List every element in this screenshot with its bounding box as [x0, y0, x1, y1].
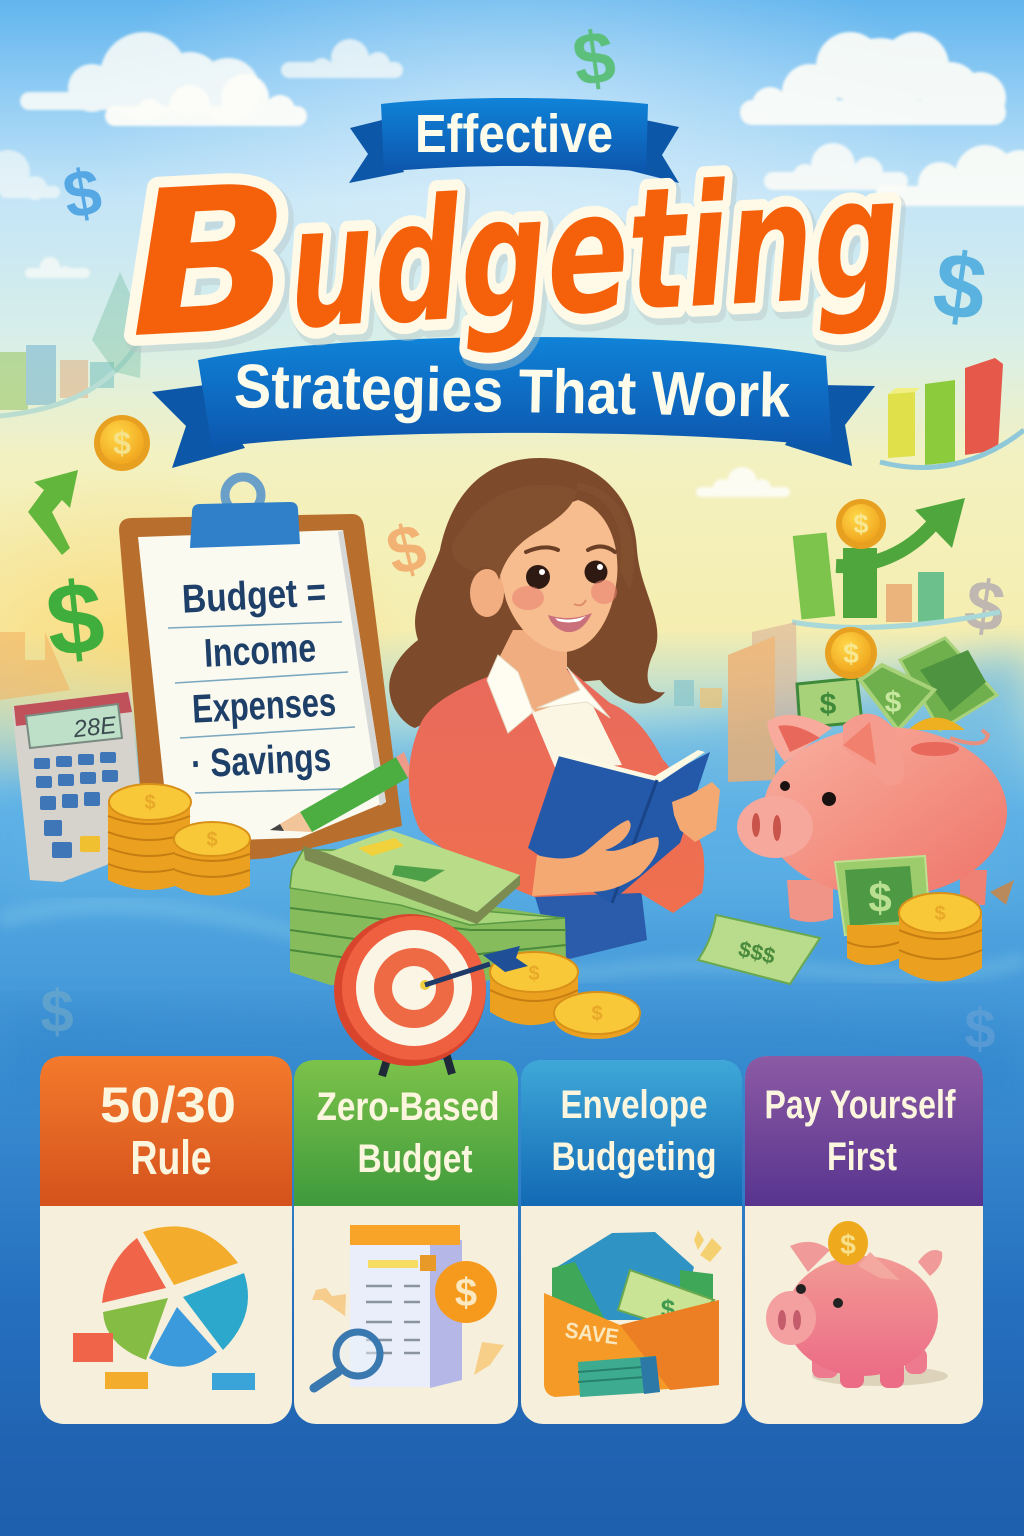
clipboard clip: [190, 477, 300, 548]
target: [334, 914, 528, 1076]
growth chart right: $: [853, 509, 869, 539]
budget formula: · Savings: [190, 735, 332, 787]
dollar sign decorations: $: [927, 233, 992, 341]
card: Pay Yourself First: Pay Yourself: [764, 1083, 956, 1127]
card: Pay Yourself First: First: [827, 1135, 897, 1179]
envelope icon: [544, 1230, 722, 1397]
budget formula: Expenses: [191, 680, 337, 732]
book: [528, 752, 710, 903]
dollar sign decorations: $: [41, 559, 109, 679]
dollar sign decorations: $: [58, 153, 107, 233]
title: Budgeting: B: [122, 142, 299, 383]
coins center: $: [591, 1003, 603, 1025]
faded buildings: [0, 622, 798, 782]
coin stacks left: [108, 784, 250, 896]
clipboard: [119, 477, 412, 866]
card: Zero-Based Budget: Zero-Based: [316, 1085, 500, 1129]
collar: [487, 655, 610, 733]
ribbon: Effective: [349, 98, 679, 183]
envelope icon: SAVE: [563, 1317, 620, 1350]
ribbon: Effective: Effective: [415, 104, 613, 164]
coin top left: [94, 415, 150, 471]
piggy bank: [737, 714, 1014, 922]
bills and coins by piggy: $: [934, 903, 946, 925]
growth chart right: [792, 498, 1000, 627]
card: Pay Yourself First: [745, 1056, 983, 1424]
piggy icon: [766, 1221, 948, 1388]
text: Strategies That Work: Strategies That Work: [233, 352, 791, 431]
title: Budgeting: B: [122, 142, 299, 383]
dollar sign decorations: $: [964, 997, 996, 1060]
document icon: [312, 1225, 504, 1388]
cheeks: [512, 586, 544, 610]
budget formula: [181, 570, 337, 787]
coins center: $: [528, 963, 540, 985]
bills atop piggy: $: [843, 638, 859, 669]
brows: [526, 546, 615, 552]
card: Zero-Based Budget: Budget: [358, 1137, 472, 1181]
dollar sign decorations: $: [960, 565, 1010, 647]
card: 50/30 Rule: Rule: [130, 1132, 212, 1185]
clouds: [0, 32, 1024, 497]
dollar sign decorations: [40, 15, 1010, 1060]
card: Envelope Budgeting: [521, 1060, 742, 1424]
card: Zero-Based Budget: [294, 1060, 518, 1424]
neck: [498, 630, 585, 712]
bills and coins by piggy: [835, 856, 982, 982]
dollar bill on ground: [698, 915, 820, 984]
budget formula: Income: [203, 626, 317, 676]
card: 50/30 Rule: 50/30: [100, 1077, 236, 1133]
fringe hair: [452, 483, 634, 590]
face: [496, 500, 617, 652]
cardigan: [409, 670, 704, 913]
nose: [574, 600, 586, 605]
calculator: 28E: [71, 712, 119, 743]
pie chart: [73, 1226, 255, 1390]
faded bar chart left: [0, 340, 140, 416]
pencil: [270, 752, 412, 832]
coin stacks left: $: [206, 829, 218, 851]
title: Budgeting: [122, 110, 908, 388]
card: Envelope Budgeting: Budgeting: [552, 1135, 716, 1179]
bar chart icon right: [880, 358, 1024, 467]
dollar bill on ground: $$$: [736, 936, 778, 969]
faded green leaf arrow: [92, 272, 142, 378]
coins center: [490, 952, 640, 1039]
ribbon: Strategies That Work (banner): [152, 337, 875, 468]
bills atop piggy: $: [820, 688, 837, 721]
bills atop piggy: [797, 627, 997, 730]
bills atop piggy: $: [885, 686, 902, 719]
card: Envelope Budgeting: Envelope: [560, 1083, 708, 1127]
hand lower: [532, 820, 659, 896]
piggy icon: $: [840, 1229, 856, 1260]
shirt: [530, 700, 622, 770]
skirt: [530, 880, 647, 960]
document icon: $: [455, 1271, 477, 1315]
budget formula: Budget =: [181, 570, 327, 622]
hair back: [389, 458, 665, 728]
woman: [389, 458, 720, 960]
money stack center: [290, 830, 566, 985]
dollar sign decorations: $: [379, 509, 433, 589]
dollar sign decorations: $: [568, 15, 620, 102]
title: Budgeting: B: [125, 147, 302, 388]
card: 50/30 Rule: [40, 1056, 292, 1424]
coin stacks left: $: [144, 792, 156, 814]
envelope icon: $: [661, 1294, 676, 1324]
mouth: [548, 613, 592, 632]
bills and coins by piggy: $: [868, 874, 892, 921]
ear: [470, 569, 504, 617]
hand right: [672, 782, 720, 842]
calculator: [12, 692, 146, 882]
arrow: [425, 946, 528, 985]
strategy cards: [40, 1056, 983, 1424]
eyes: [526, 560, 608, 589]
coin top left: $: [113, 425, 131, 461]
dollar sign decorations: $: [40, 978, 74, 1045]
arrow icon left: [28, 470, 78, 555]
